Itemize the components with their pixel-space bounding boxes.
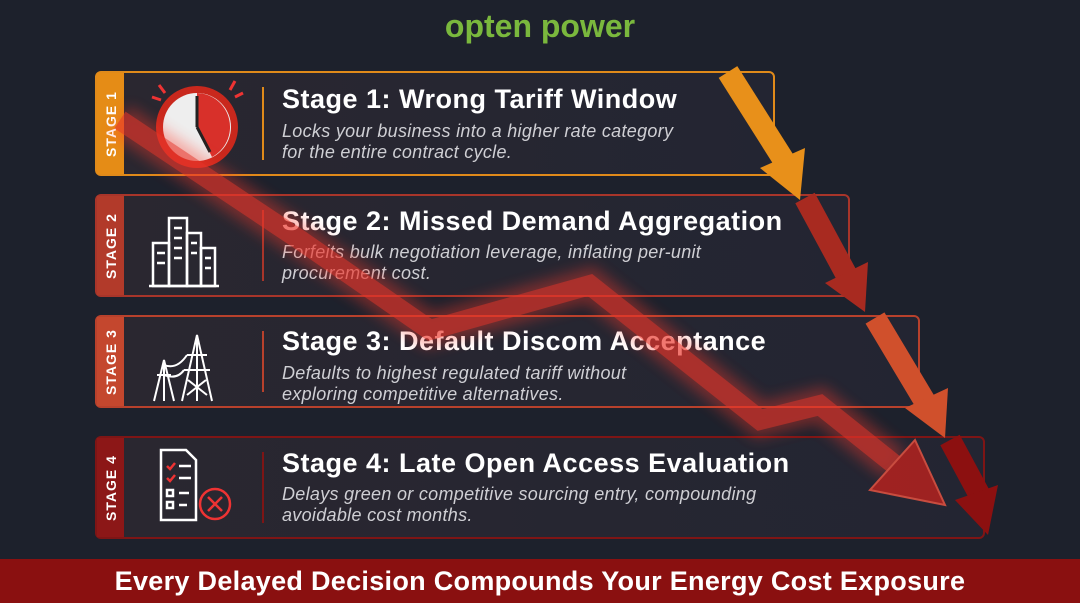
arrow: cascade 3: [875, 318, 948, 438]
heading: stage 3: Stage 3: Default Discom Acceptance: [282, 326, 766, 356]
icon: checklist: [160, 448, 232, 522]
arrow: trend line: [120, 120, 945, 505]
text: stage 3: [282, 363, 627, 404]
tab: stage 2: [97, 196, 124, 295]
footer banner: Every Delayed Decision Compounds Your Energy Cost Exposure: [115, 566, 965, 596]
arrow: cascade 1: [728, 72, 805, 200]
logo: opten power: [445, 8, 635, 44]
text: stage 2: [282, 242, 702, 283]
heading: stage 1: Stage 1: Wrong Tariff Window: [282, 84, 677, 114]
tab: stage 4: STAGE 4: [102, 455, 118, 520]
text: stage 2: procurement cost.: [282, 263, 431, 283]
text: stage 1: for the entire contract cycle.: [282, 142, 512, 162]
text: stage 1: [282, 121, 674, 162]
tab: stage 1: [97, 73, 124, 174]
panel: stage 3: [95, 315, 920, 408]
text: stage 4: Delays green or competitive sourcing entry, compounding: [282, 484, 756, 504]
tab: stage 3: [97, 317, 124, 406]
panel: stage 2: [95, 194, 850, 297]
icon: buildings: [149, 216, 219, 288]
text: stage 4: [282, 484, 756, 525]
tab: stage 2: STAGE 2: [102, 213, 118, 278]
text: stage 3: Defaults to highest regulated tariff without: [282, 363, 626, 383]
text: stage 2: Forfeits bulk negotiation leverage, inflating per-unit: [282, 242, 701, 262]
arrow: cascade 4: [950, 440, 998, 535]
icon: pylons: [153, 334, 213, 402]
heading: stage 4: Stage 4: Late Open Access Evaluation: [282, 448, 790, 478]
panel: stage 4: [95, 436, 985, 539]
panel: stage 1: [95, 71, 775, 176]
tab: stage 1: STAGE 1: [102, 91, 118, 156]
text: stage 4: avoidable cost months.: [282, 505, 473, 525]
tab: stage 4: [97, 438, 124, 537]
icon: clock: [152, 80, 244, 168]
footer banner: [0, 559, 1080, 603]
arrow: cascade 2: [805, 198, 868, 312]
text: stage 3: exploring competitive alternatives.: [282, 384, 564, 404]
tab: stage 3: STAGE 3: [102, 329, 118, 394]
text: stage 1: Locks your business into a higher rate category: [282, 121, 673, 141]
heading: stage 2: Stage 2: Missed Demand Aggregation: [282, 206, 783, 236]
